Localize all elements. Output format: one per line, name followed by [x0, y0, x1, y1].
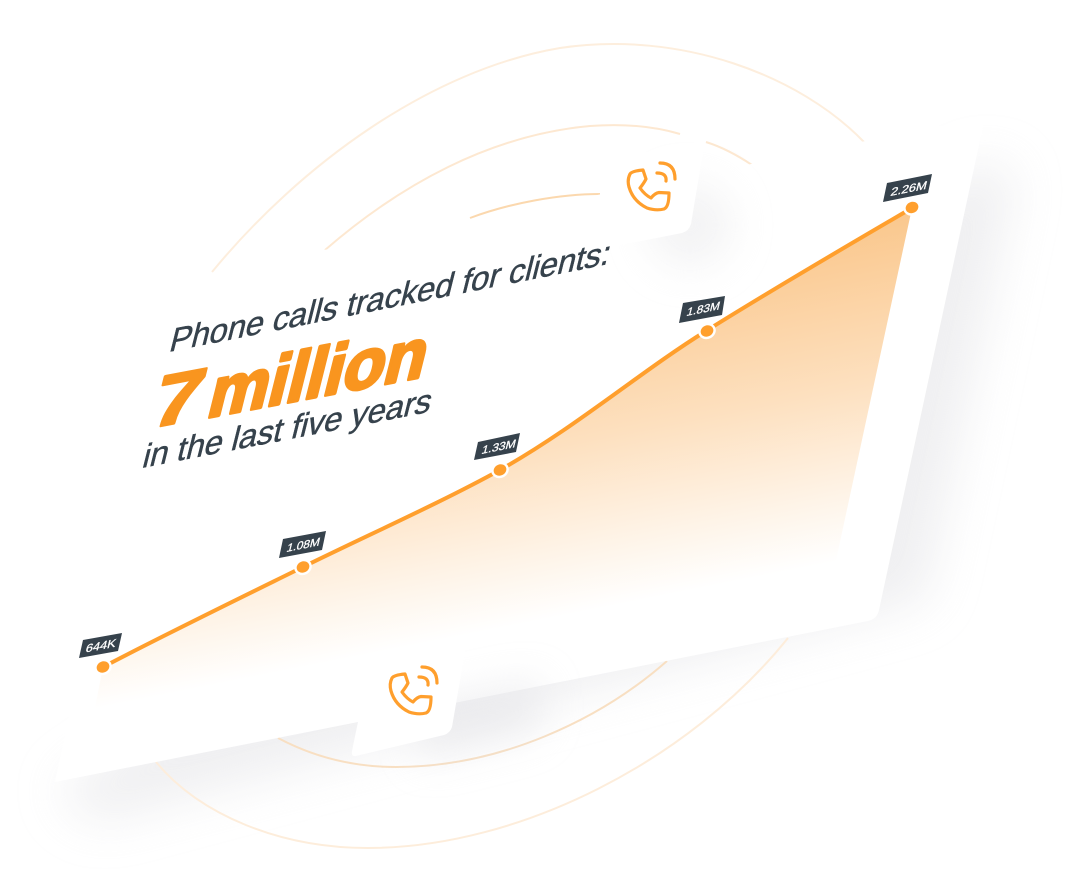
- decorative arc: bottom inner: [278, 661, 667, 767]
- line chart: growth line: [103, 208, 912, 667]
- icon: phone call: [390, 667, 437, 714]
- decorative arc: bottom outer: [156, 638, 788, 848]
- top icon card shadow: [648, 183, 732, 267]
- panel: bottom icon card: [352, 634, 468, 756]
- decorative arc: top middle: [325, 125, 752, 250]
- data point: 1.33M: 1.33M: [480, 437, 517, 457]
- icon: phone call: [628, 163, 675, 210]
- panel: top icon card: [590, 140, 705, 251]
- subheading: last five years: in the last five years: [139, 382, 437, 476]
- decorative arc: top inner: [470, 194, 600, 218]
- data point: 1.33M: [474, 433, 520, 481]
- card drop shadow: [58, 160, 1015, 822]
- main white card: [55, 117, 985, 782]
- headline number: 7 million: [145, 311, 438, 445]
- bottom icon card shadow: [420, 680, 540, 760]
- headline number: 7 million: 7: [145, 352, 214, 445]
- headline number: 7 million: million: [201, 311, 438, 434]
- data point: 1.08M: 1.08M: [285, 536, 321, 555]
- area under line chart: [93, 208, 912, 718]
- data point: 2.26M: [883, 174, 932, 219]
- data point: 2.26M: 2.26M: [889, 179, 928, 199]
- data point: 644K: 644K: [84, 637, 118, 655]
- data point: 1.83M: [679, 296, 725, 342]
- data point: 1.83M: 1.83M: [685, 300, 721, 319]
- heading: phone calls tracked: Phone calls tracked for clients:: [166, 234, 616, 360]
- data point: 1.08M: [279, 531, 326, 578]
- data point: 644K: [79, 633, 122, 678]
- decorative arc: top outer: [212, 44, 865, 272]
